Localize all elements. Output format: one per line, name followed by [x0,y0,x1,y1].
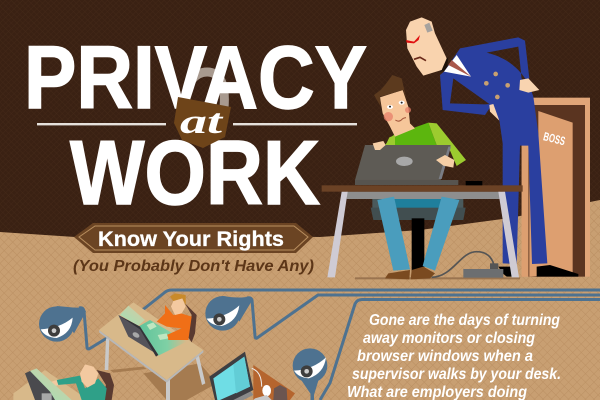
boss head [406,17,447,76]
intro paragraph [347,312,561,400]
intro paragraph: away monitors or closing [363,330,535,347]
boss shoes [498,265,578,277]
title rule left [37,123,166,125]
monitor [209,352,253,400]
employee mouth [395,118,406,121]
power strip and cable [432,252,503,278]
worker three head [273,385,287,400]
eye three [293,348,327,400]
boss hands [489,78,539,121]
banner text: Know Your Rights [98,228,284,251]
boss shirt and tie [444,55,471,77]
desk one shadow [110,363,217,400]
line to third eye [310,375,314,400]
title [24,27,367,224]
worker one [147,293,192,340]
desk two [13,370,88,400]
title word: privacy: PRIVACY [24,27,367,127]
lower office scene [13,293,327,400]
eye two [205,296,252,331]
employee jeans [377,197,459,271]
intro paragraph: Gone are the days of turning [369,312,560,329]
boss eyebrows [406,35,420,43]
worker two chair [97,370,114,400]
laptop one [118,315,158,357]
door sign: BOSS [542,129,567,148]
intro paragraph: supervisor walks by your desk. [352,366,561,383]
subtitle banner [74,223,313,253]
worker two [47,364,107,400]
boss buttons [484,72,510,99]
employee [355,75,466,279]
worker one chair [185,303,197,342]
padlock body [174,97,231,148]
ground shadow [355,277,520,279]
banner inner outline [79,226,308,250]
desk three [253,365,295,400]
keyboard [253,395,272,400]
employee shoes [385,267,435,279]
employee sweater [385,123,437,145]
laptop [355,145,451,180]
employee sleeves [386,123,466,166]
subtitle note: (You Probably Don't Have Any) [73,258,314,275]
employee head [380,90,415,137]
padlock shackle [185,72,224,108]
title rule right [233,123,357,125]
employee eyes [387,101,405,109]
mouse and cable [252,368,271,396]
boss collar shadow [440,57,448,72]
boss [406,17,578,277]
employee blush [384,107,411,121]
desk one top [99,330,203,383]
word: at: at [180,102,224,141]
blue connector lines [79,290,600,400]
line to second eye [247,295,600,338]
office chair [371,199,466,272]
screen glow one [120,306,187,356]
banner shape [74,223,313,253]
title word: work: WORK [70,123,320,224]
eye one [39,306,86,342]
door [522,98,590,277]
dark wall background [0,0,600,240]
intro paragraph: browser windows when a [357,348,533,365]
line to text block [320,300,600,400]
office illustration: employee and boss [322,17,590,279]
employee hair [374,75,407,107]
desk [322,181,523,277]
boss mouth [414,57,426,61]
desk one legs [105,338,205,400]
boss suit [440,37,547,264]
laptop two [25,368,72,400]
line to first eye [79,290,600,349]
employee hands [373,141,454,168]
boss ear [424,23,433,33]
